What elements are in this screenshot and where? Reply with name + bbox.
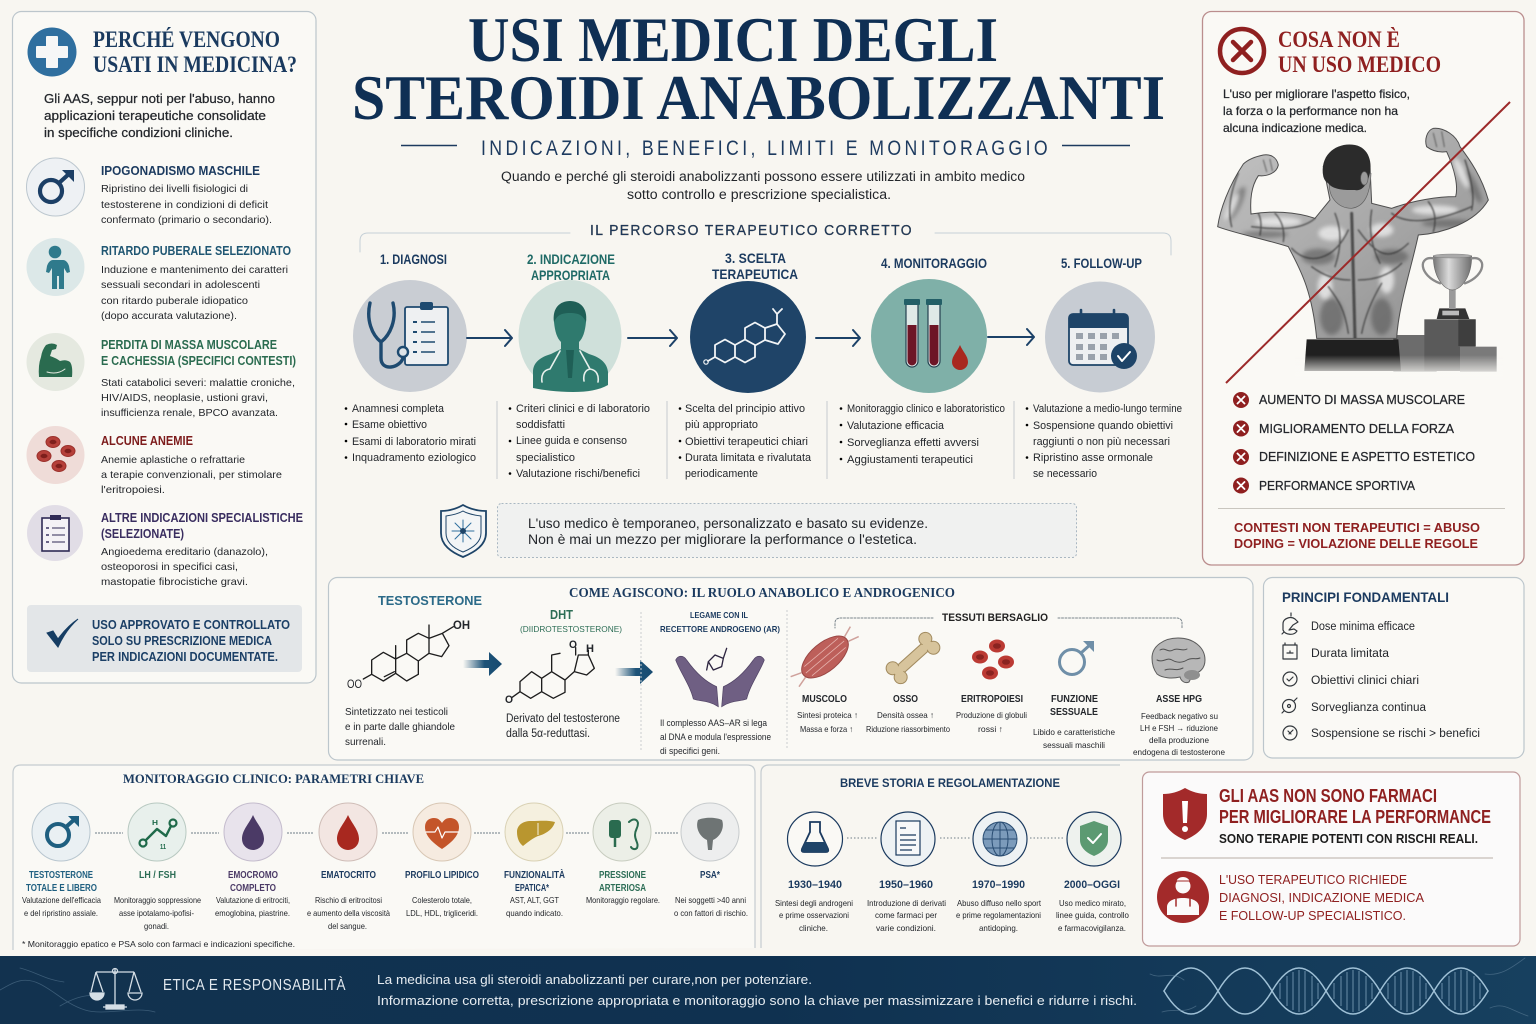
step 3 scelta: 3. SCELTA [725,250,786,266]
testosterone: e in parte dalle ghiandole [345,721,455,733]
item: ipogonadismo: IPOGONADISMO MASCHILE [101,164,260,178]
item: pressione: ARTERIOSA [599,882,646,894]
item: ritardo puberale: (dopo accurata valutazione). [101,310,237,322]
icon: child [26,238,84,296]
principle list: Sorveglianza continua [1311,702,1427,714]
principle list [1311,621,1480,740]
step 4 monitoraggio: Aggiustamenti terapeutici [847,454,973,466]
text: ethics statement: Informazione corretta, prescrizione appropriata e monitoraggio sono la chiave per massimizzare i benefici e ridurre i rischi. [377,993,1137,1008]
callout: approved use: USO APPROVATO E CONTROLLATO [92,618,290,632]
step 3 scelta: Obiettivi terapeutici chiari [685,436,808,448]
text: ethics statement: La medicina usa gli steroidi anabolizzanti per curare,non per potenziare. [377,972,812,987]
item: emocromo: emoglobina, piastrine. [215,908,290,918]
item: funzionalità epatica: AST, ALT, GGT [510,895,559,905]
item: funzionalità epatica: EPATICA* [515,882,550,894]
tissue: bone: OSSO [893,693,918,705]
text: therapeutic requirement: E FOLLOW-UP SPECIALISTICO. [1219,908,1406,923]
heading: breve storia: BREVE STORIA E REGOLAMENTAZIONE [840,778,1060,790]
text: not medical: alcuna indicazione medica. [1223,121,1367,135]
tissue: bone: Riduzione riassorbimento [866,724,950,734]
item: ipogonadismo: confermato (primario o secondario). [101,214,272,226]
tissue: muscle: MUSCOLO [802,693,847,705]
DHT: dalla 5α-reduttasi. [506,728,590,740]
text: ethics statement [377,972,1137,1008]
icon: clipboard [27,505,83,561]
item: ipogonadismo: testosterene in condizioni di deficit [101,199,268,211]
icon: shield [441,505,486,557]
item: testosterone: e del ripristino assiale. [24,908,98,918]
step 4 monitoraggio: Valutazione efficacia [847,420,945,432]
era 2000: linee guida, controllo [1056,910,1129,920]
item: altre indicazioni: mastopatie fibrocistiche gravi. [101,576,248,588]
era 1970: 1970–1990 [972,879,1025,891]
tissue: sexual function: FUNZIONE [1051,693,1098,705]
panel: what is not medical use [1202,12,1524,565]
list: non-medical uses [1233,392,1475,494]
list: non-medical uses: DEFINIZIONE E ASPETTO ESTETICO [1259,450,1475,464]
tissue: HPG axis brain: Feedback negativo su [1141,711,1218,721]
callout: temporary use [498,504,1076,558]
heading: percorso terapeutico: IL PERCORSO TERAPEUTICO CORRETTO [590,222,913,239]
item: testosterone: Valutazione dell'efficacia [22,895,101,905]
icon: DNA helix [1150,958,1528,1016]
item: funzionalità epatica [504,803,565,918]
tissue: erythropoiesis [956,640,1027,734]
arrow 1 [467,330,512,346]
icon: cross in circle [1220,29,1264,73]
item: pressione [586,803,660,905]
step 3 scelta: periodicamente [685,468,758,480]
item: PSA: o con fattori di rischio. [674,908,748,918]
text: therapeutic requirement: L'USO TERAPEUTICO RICHIEDE [1219,872,1407,887]
item: PSA [674,803,748,918]
list: non-medical uses: AUMENTO DI MASSA MUSCOLARE [1259,393,1465,407]
callout: temporary use: Non è mai un mezzo per migliorare la performance o l'estetica. [528,532,917,547]
step 2 indicazione: specialistico [516,452,575,464]
tissue: sexual function: Libido e caratteristiche [1033,727,1115,737]
item: ritardo puberale [101,244,291,322]
subtitle: INDICAZIONI, BENEFICI, LIMITI E MONITORAGGIO [481,137,1051,160]
DHT: O [569,639,577,651]
androgen receptor: Il complesso AAS–AR si lega [660,718,767,728]
principle icons [1282,613,1298,740]
era 1930: Sintesi degli androgeni [775,898,853,908]
principle list: Obiettivi clinici chiari [1311,675,1419,687]
item: ipogonadismo [101,164,272,226]
item: ematocrito: Rischio di eritrocitosi [315,895,382,905]
step 5 follow-up: 5. FOLLOW-UP [1061,255,1142,271]
warning text: contexts: CONTESTI NON TERAPEUTICI = ABUSO [1234,521,1480,535]
step 5 follow-up: se necessario [1033,468,1097,480]
icon: male symbol [26,158,84,216]
icon: warning shield [1163,788,1207,840]
callout: approved use: SOLO SU PRESCRIZIONE MEDICA [92,634,272,648]
tissue: HPG axis brain: della produzione [1149,735,1209,745]
item: anemie [101,434,282,496]
item: altre indicazioni: (SELEZIONATE) [101,527,184,541]
red strike line [1226,102,1510,383]
tissue: sexual function: SESSUALE [1050,706,1098,718]
era 1930: 1930–1940 [788,879,842,891]
step 2 indicazione: Criteri clinici e di laboratorio [516,403,650,415]
androgen receptor: di specifici geni. [660,746,720,756]
era 1950 [867,812,946,933]
step 5 follow-up [1014,255,1182,480]
item: pressione: PRESSIONE [599,869,646,881]
text: therapeutic requirement: DIAGNOSI, INDICAZIONE MEDICA [1219,890,1424,905]
tissue: sexual function [1033,641,1115,750]
icon: muscle arm [26,333,84,391]
item: ritardo puberale: con ritardo puberale idiopatico [101,295,248,307]
item: perdita massa [101,338,296,419]
step 2 indicazione: soddisfatti [516,419,565,431]
item: ritardo puberale: RITARDO PUBERALE SELEZIONATO [101,244,291,258]
step 2 indicazione: APPROPRIATA [531,267,610,283]
era 1930 [775,812,853,933]
tissue: HPG axis brain: LH e FSH → riduzione [1140,723,1218,733]
callout: approved use [27,605,302,672]
androgen receptor [660,610,780,756]
step 1 diagnosi: 1. DIAGNOSI [380,251,447,267]
text: not medical [1223,87,1410,135]
step 4 monitoraggio: Monitoraggio clinico e laboratoristico [847,403,1005,415]
item: emocromo [215,803,290,918]
tissue: erythropoiesis: rossi ↑ [978,724,1003,734]
tissue: erythropoiesis: ERITROPOIESI [961,693,1023,705]
description: sotto controllo e prescrizione specialistica. [627,187,891,202]
step 1 diagnosi: Esami di laboratorio mirati [352,436,476,448]
item: PSA: PSA* [700,869,721,881]
panel: history and regulation [761,765,1129,948]
description: Quando e perché gli steroidi anabolizzanti possono essere utilizzati in ambito medico [501,169,1025,184]
step 1 diagnosi: Inquadramento eziologico [352,452,476,464]
item: testosterone: TESTOSTERONE [29,869,93,881]
text: not medical: L'uso per migliorare l'aspetto fisico, [1223,87,1410,101]
era 1950: varie condizioni. [876,923,936,933]
tissue: bone [866,630,950,734]
item: emocromo: EMOCROMO [228,869,278,881]
item: anemie: ALCUNE ANEMIE [101,434,193,448]
step 3 scelta: Scelta del principio attivo [685,403,805,415]
target tissues heading [835,612,1182,628]
step 5 follow-up: Sospensione quando obiettivi [1033,420,1173,432]
panel: warning [1142,772,1520,946]
item: anemie: l'eritropoiesi. [101,484,165,496]
DHT: H [586,643,594,655]
era 1930: e prime osservazioni [779,910,849,920]
DHT: DHT [550,607,573,622]
heading: perché vengono usati [93,27,297,77]
era 1970 [956,812,1042,933]
era 1950: come farmaci per [875,910,937,920]
text: therapeutic requirement [1219,872,1424,923]
title: USI MEDICI DEGLI [468,5,998,75]
step 2 indicazione [497,251,650,480]
connectors [847,837,1065,839]
heading: cosa non è: COSA NON È [1278,27,1400,52]
step 5 follow-up: raggiunti o non più necessari [1033,436,1170,448]
step 1 diagnosi [345,251,476,464]
androgen receptor: LEGAME CON IL [690,610,748,620]
heading: perché vengono usati: USATI IN MEDICINA? [93,52,297,77]
icon: scales [90,968,142,1009]
DHT: Derivato del testosterone [506,713,620,725]
era 2000: 2000–OGGI [1064,879,1120,891]
step 4 monitoraggio [827,255,1005,479]
warning text: contexts [1234,521,1480,551]
panel: how they act [328,578,1253,760]
tissue: sexual function: sessuali maschili [1043,740,1105,750]
warning text: contexts: DOPING = VIOLAZIONE DELLE REGOLE [1234,537,1478,551]
item: LH FSH: gonadi. [144,921,169,931]
arrow: testosterone to DHT [463,652,502,676]
illustration: bodybuilder and trophy [1218,128,1503,378]
item: LH FSH: Monitoraggio soppressione [114,895,201,905]
step 3 scelta: più appropriato [685,419,758,431]
heading: not performance drugs [1219,786,1491,846]
item: LH FSH: LH / FSH [139,869,176,881]
item: profilo lipidico: LDL, HDL, trigliceridi. [406,908,478,918]
era 1970: Abuso diffuso nello sport [957,898,1042,908]
testosterone: TESTOSTERONE [378,593,482,608]
item: LH FSH: asse ipotalamo-ipofisi- [119,908,194,918]
panel: clinical monitoring [13,765,755,950]
principle list: Durata limitata [1311,648,1390,660]
item: profilo lipidico: PROFILO LIPIDICO [405,869,479,881]
androgen receptor: al DNA e modula l'espressione [660,732,771,742]
tissue: muscle [786,621,864,734]
item: altre indicazioni: Angioedema ereditario (danazolo), [101,546,268,558]
tissue: HPG axis brain: ASSE HPG [1156,693,1202,705]
item: PSA: Nei soggetti >40 anni [675,895,746,905]
list: non-medical uses: MIGLIORAMENTO DELLA FORZA [1259,422,1455,436]
item: LH FSH: 11 [160,844,166,851]
panel: therapeutic path [345,222,1182,558]
text: not medical: la forza o la performance non ha [1223,104,1398,118]
item: ipogonadismo: Ripristino dei livelli fisiologici di [101,183,248,195]
testosterone: OO [347,677,362,691]
item: ematocrito: EMATOCRITO [321,869,376,881]
heading: perché vengono usati: PERCHÉ VENGONO [93,27,280,52]
panel: fundamental principles [1264,578,1524,758]
item: ematocrito: e aumento della viscosità [307,908,390,918]
arrow 3 [816,330,860,346]
tissue: bone: Densità ossea ↑ [877,710,934,720]
heading: not performance drugs: GLI AAS NON SONO FARMACI [1219,786,1437,806]
step 4 monitoraggio: Sorveglianza effetti avversi [847,437,979,449]
era 1970: e prime regolamentazioni [956,910,1041,920]
heading: etica: ETICA E RESPONSABILITÀ [163,977,346,994]
era 1950: 1950–1960 [879,879,933,891]
heading: cosa non è: UN USO MEDICO [1278,52,1441,77]
era 2000: e farmacovigilanza. [1058,923,1126,933]
item: profilo lipidico: Colesterolo totale, [412,895,472,905]
step 5 follow-up: Valutazione a medio-lungo termine [1033,403,1182,415]
item: emocromo: Valutazione di eritrociti, [216,895,290,905]
principle list: Sospensione se rischi > benefici [1311,728,1480,740]
step 1 diagnosi: Anamnesi completa [352,403,445,415]
item: altre indicazioni [101,511,303,588]
tissue: erythropoiesis: Produzione di globuli [956,710,1027,720]
heading: principi: PRINCIPI FONDAMENTALI [1282,589,1449,605]
item: perdita massa: PERDITA DI MASSA MUSCOLARE [101,338,277,352]
item: anemie: Anemie aplastiche o refrattarie [101,454,245,466]
icon: red blood cells [26,426,84,484]
item: testosterone: TOTALE E LIBERO [26,882,97,894]
tissue: HPG axis brain: endogena di testosterone [1133,747,1225,757]
heading: monitoraggio clinico: MONITORAGGIO CLINICO: PARAMETRI CHIAVE [123,771,424,786]
list: non-medical uses: PERFORMANCE SPORTIVA [1259,479,1416,493]
tissue: muscle: Massa e forza ↑ [800,724,853,734]
item: anemie: a terapie convenzionali, per stimolare [101,469,282,481]
intro text: in specifiche condizioni cliniche. [44,125,233,140]
footnote: * Monitoraggio epatico e PSA solo con farmaci e indicazioni specifiche. [22,939,295,949]
arrow 2 [628,330,677,346]
testosterone: surrenali. [345,736,386,748]
item: ritardo puberale: Induzione e mantenimento dei caratteri [101,264,288,276]
description [501,169,1025,202]
era 1970: antidoping. [979,923,1018,933]
item: perdita massa: HIV/AIDS, neoplasie, ustioni gravi, [101,392,268,404]
target tissues heading: TESSUTI BERSAGLIO [942,612,1048,624]
DHT: (DIIDROTESTOSTERONE) [520,624,622,634]
step 5 follow-up: Ripristino asse ormonale [1033,452,1153,464]
item: testosterone [22,803,101,918]
step 3 scelta: TERAPEUTICA [712,266,798,282]
step 2 indicazione: Linee guida e consenso [516,435,627,447]
heading: cosa non è [1278,27,1441,77]
item: perdita massa: E CACHESSIA (SPECIFICI CONTESTI) [101,354,296,368]
item: altre indicazioni: ALTRE INDICAZIONI SPECIALISTICHE [101,511,303,525]
intro text: Gli AAS, seppur noti per l'abuso, hanno [44,91,275,106]
item: altre indicazioni: osteoporosi in specifici casi, [101,561,238,573]
item: emocromo: COMPLETO [230,882,276,894]
era 2000 [1056,812,1129,933]
era 2000: Uso medico mirato, [1059,898,1126,908]
DHT: O [505,694,513,706]
DHT [505,607,622,740]
callout: approved use: PER INDICAZIONI DOCUMENTATE. [92,650,278,664]
icon: medical cross [28,28,76,76]
androgen receptor: RECETTORE ANDROGENO (AR) [660,624,780,634]
principle list: Dose minima efficace [1311,621,1415,633]
item: funzionalità epatica: FUNZIONALITÀ [504,868,565,881]
callout: temporary use: L'uso medico è temporaneo, personalizzato e basato su evidenze. [528,516,928,531]
arrow: DHT to receptor [615,660,653,684]
step 2 indicazione: Valutazione rischi/benefici [516,468,640,480]
arrow 4 [988,329,1034,345]
item: funzionalità epatica: quando indicato. [506,908,563,918]
step 1 diagnosi: Esame obiettivo [352,419,427,431]
item: perdita massa: insufficienza renale, BPCO avanzata. [101,407,278,419]
testosterone: OH [453,618,470,632]
footer band: ethics [0,956,1536,1024]
step 2 indicazione: 2. INDICAZIONE [527,251,615,267]
item: ritardo puberale: sessuali secondari in adolescenti [101,279,260,291]
step 3 scelta: Durata limitata e rivalutata [685,452,812,464]
intro text: applicazioni terapeutiche consolidate [44,108,266,123]
step 3 scelta [667,250,812,480]
era 1930: cliniche. [799,923,828,933]
item: LH FSH [114,803,201,931]
icon: doctor [1157,871,1209,923]
era 1950: Introduzione di derivati [867,898,946,908]
testosterone: Sintetizzato nei testicoli [345,706,448,718]
heading: come agiscono: COME AGISCONO: IL RUOLO ANABOLICO E ANDROGENICO [569,585,955,600]
intro text [44,91,275,140]
title: STEROIDI ANABOLIZZANTI [352,63,1165,133]
panel: why used in medicine [12,12,316,683]
testosterone [345,593,482,748]
item: pressione: Monitoraggio regolare. [586,895,660,905]
tissue: muscle: Sintesi proteica ↑ [797,710,858,720]
item: ematocrito: del sangue. [328,921,367,931]
step 4 monitoraggio: 4. MONITORAGGIO [881,255,987,271]
heading: not performance drugs: SONO TERAPIE POTENTI CON RISCHI REALI. [1219,832,1478,846]
tissue: HPG axis brain [1133,638,1225,757]
item: profilo lipidico [405,803,479,918]
title [352,5,1165,133]
item: ematocrito [307,803,390,931]
connectors [95,832,678,834]
item: LH FSH: H [152,820,158,827]
item: perdita massa: Stati catabolici severi: malattie croniche, [101,377,295,389]
